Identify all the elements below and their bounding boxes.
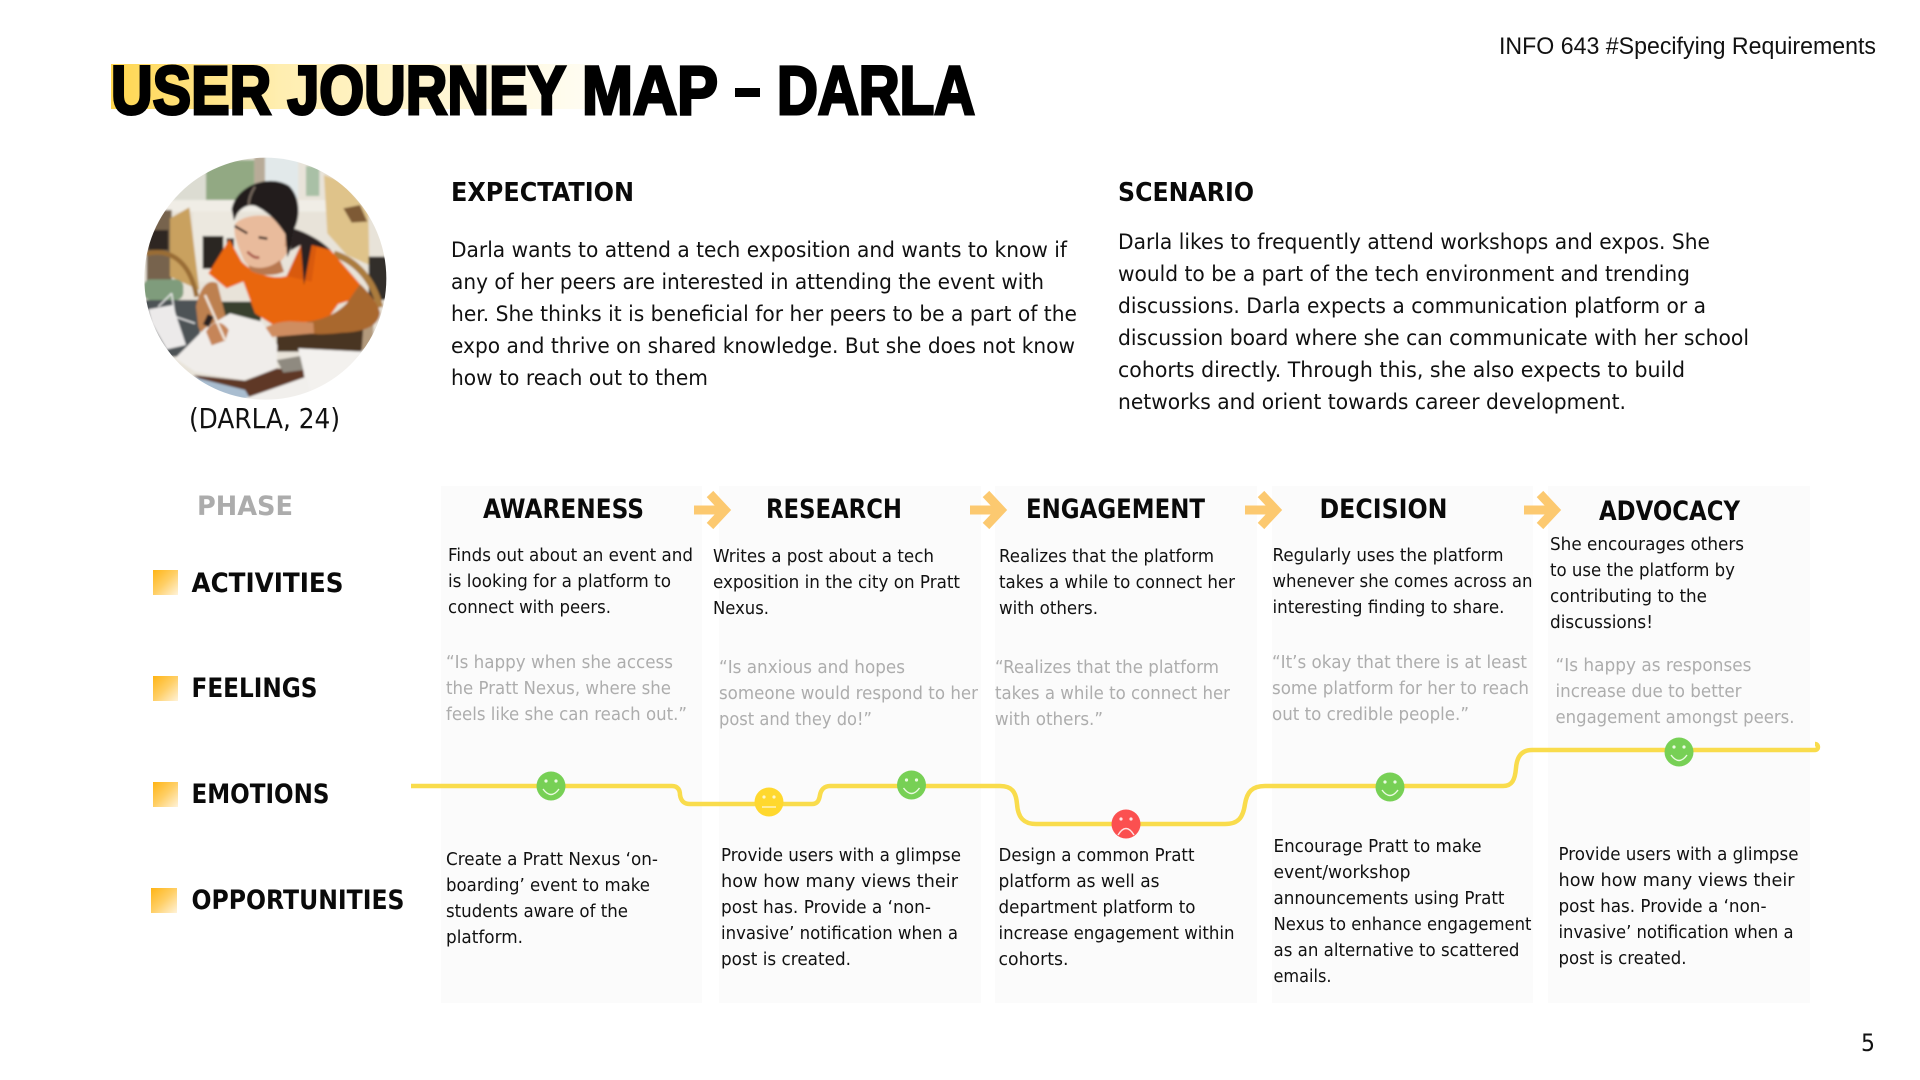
scenario block: cohorts directly. Through this, she also expects to build xyxy=(1118,358,1685,383)
panel: research: RESEARCH xyxy=(766,494,902,525)
scenario block: discussions. Darla expects a communication platform or a xyxy=(1118,294,1706,319)
panel: engagement: “Realizes that the platform xyxy=(995,658,1219,678)
title with yellow highlight: MAP xyxy=(582,52,718,129)
panel: engagement: takes a while to connect her xyxy=(995,684,1231,704)
emotion: sad engagement xyxy=(1112,810,1140,838)
panel: awareness: boarding’ event to make xyxy=(446,876,650,896)
panel: advocacy: “Is happy as responses xyxy=(1556,656,1752,676)
panel: awareness: Create a Pratt Nexus ‘on- xyxy=(446,850,658,870)
panel: research: Nexus. xyxy=(713,599,769,619)
panel: advocacy: how how many views their xyxy=(1558,871,1795,891)
expectation block xyxy=(451,178,1077,391)
panel: decision: announcements using Pratt xyxy=(1274,889,1505,909)
expectation block: how to reach out to them xyxy=(451,366,708,391)
panel: decision xyxy=(1272,486,1533,1003)
row labels xyxy=(151,491,404,916)
panel: research: someone would respond to her xyxy=(719,684,979,704)
arrow: awareness to research xyxy=(694,494,725,526)
panel: awareness: students aware of the xyxy=(446,902,628,922)
panel: decision: interesting finding to share. xyxy=(1272,598,1504,618)
panel: engagement: increase engagement within xyxy=(998,924,1234,944)
panel: decision: some platform for her to reach xyxy=(1272,679,1529,699)
panel: research xyxy=(713,486,981,1003)
emotion: happy research xyxy=(897,770,926,800)
panel: engagement xyxy=(995,486,1257,1003)
panel: research: post and they do!” xyxy=(719,710,872,730)
course tag: INFO 643 #Specifying Requirements xyxy=(1499,33,1876,60)
panel: research: invasive’ notification when a xyxy=(721,924,958,944)
panel: awareness: AWARENESS xyxy=(483,494,644,525)
panel: decision: as an alternative to scattered xyxy=(1274,941,1520,961)
scenario block: discussion board where she can communicate with her school xyxy=(1118,326,1749,351)
emotion curve xyxy=(411,744,1818,824)
panel: research: Writes a post about a tech xyxy=(713,547,934,567)
row labels: PHASE xyxy=(197,491,293,522)
panel: advocacy: to use the platform by xyxy=(1550,561,1735,581)
panel: decision: “It’s okay that there is at least xyxy=(1272,653,1527,673)
emotion: happy decision xyxy=(1376,772,1404,802)
emotion: happy awareness xyxy=(536,772,566,800)
panel: engagement: with others. xyxy=(999,599,1098,619)
panel: awareness: connect with peers. xyxy=(448,598,611,618)
panel: awareness: is looking for a platform to xyxy=(448,572,671,592)
panel: decision: whenever she comes across an xyxy=(1272,572,1532,592)
arrow: research to engagement xyxy=(970,494,1001,526)
panel: engagement: platform as well as xyxy=(998,872,1160,892)
panel: research: post is created. xyxy=(721,950,851,970)
scenario block: SCENARIO xyxy=(1118,178,1254,208)
panel: research: Provide users with a glimpse xyxy=(721,846,961,866)
page number: 5 xyxy=(1861,1029,1875,1057)
panel: awareness: “Is happy when she access xyxy=(446,653,673,673)
scenario block: networks and orient towards career development. xyxy=(1118,390,1626,415)
panel: awareness xyxy=(441,486,702,1003)
panel: engagement: cohorts. xyxy=(998,950,1068,970)
panel: decision: event/workshop xyxy=(1274,863,1410,883)
panel: decision: DECISION xyxy=(1320,494,1448,525)
panel: advocacy: engagement amongst peers. xyxy=(1556,708,1794,728)
panel: engagement: takes a while to connect her xyxy=(999,573,1236,593)
panel: engagement: Realizes that the platform xyxy=(999,547,1214,567)
panel: engagement: Design a common Pratt xyxy=(998,846,1195,866)
panel: advocacy: contributing to the xyxy=(1550,587,1707,607)
panel: decision: out to credible people.” xyxy=(1272,705,1469,725)
row labels: EMOTIONS xyxy=(192,779,330,810)
panel: awareness: feels like she can reach out.” xyxy=(446,705,687,725)
title with yellow highlight: DARLA xyxy=(777,52,975,129)
panel: research: how how many views their xyxy=(721,872,959,892)
row labels: ACTIVITIES xyxy=(192,568,344,599)
panel: decision: Regularly uses the platform xyxy=(1272,546,1504,566)
emotion: neutral research xyxy=(754,788,784,816)
title with yellow highlight xyxy=(111,52,975,129)
expectation block: expo and thrive on shared knowledge. But she does not know xyxy=(451,334,1075,359)
expectation block: any of her peers are interested in attending the event with xyxy=(451,270,1044,295)
panel: engagement: ENGAGEMENT xyxy=(1026,494,1205,525)
panel: advocacy: discussions! xyxy=(1550,613,1653,633)
row labels: OPPORTUNITIES xyxy=(192,885,404,916)
title with yellow highlight: USER JOURNEY xyxy=(111,52,566,129)
expectation block: Darla wants to attend a tech exposition and wants to know if xyxy=(451,238,1067,263)
panel: decision: emails. xyxy=(1274,967,1332,987)
panel: decision: Encourage Pratt to make xyxy=(1274,837,1482,857)
panel: research: post has. Provide a ‘non- xyxy=(721,898,931,918)
panel: advocacy xyxy=(1548,486,1810,1003)
expectation block: EXPECTATION xyxy=(451,178,634,208)
arrow: decision to advocacy xyxy=(1524,494,1555,526)
scenario block: Darla likes to frequently attend workshops and expos. She xyxy=(1118,230,1710,255)
panel: engagement: department platform to xyxy=(998,898,1196,918)
panel: research: exposition in the city on Pratt xyxy=(713,573,960,593)
panel: advocacy: She encourages others xyxy=(1550,535,1744,555)
panel: research: “Is anxious and hopes xyxy=(719,658,905,678)
scenario block xyxy=(1118,178,1749,415)
emotion: happy advocacy xyxy=(1664,738,1694,766)
panel: awareness: Finds out about an event and xyxy=(448,546,693,566)
scenario block: would to be a part of the tech environment and trending xyxy=(1118,262,1690,287)
panel: advocacy: ADVOCACY xyxy=(1599,496,1741,527)
row labels: FEELINGS xyxy=(192,673,318,704)
panel: engagement: with others.” xyxy=(995,710,1103,730)
panel: advocacy: invasive’ notification when a xyxy=(1558,923,1794,943)
expectation block: her. She thinks it is beneficial for her peers to be a part of the xyxy=(451,302,1077,327)
persona photo of Darla xyxy=(144,158,386,400)
panel: decision: Nexus to enhance engagement xyxy=(1274,915,1532,935)
panel: advocacy: increase due to better xyxy=(1556,682,1742,702)
persona caption: (DARLA, 24) xyxy=(189,403,340,435)
panel: advocacy: post is created. xyxy=(1558,949,1686,969)
panel: advocacy: post has. Provide a ‘non- xyxy=(1558,897,1766,917)
panel: advocacy: Provide users with a glimpse xyxy=(1558,845,1798,865)
arrow: engagement to decision xyxy=(1245,494,1276,526)
panel: awareness: the Pratt Nexus, where she xyxy=(446,679,671,699)
panel: awareness: platform. xyxy=(446,928,523,948)
